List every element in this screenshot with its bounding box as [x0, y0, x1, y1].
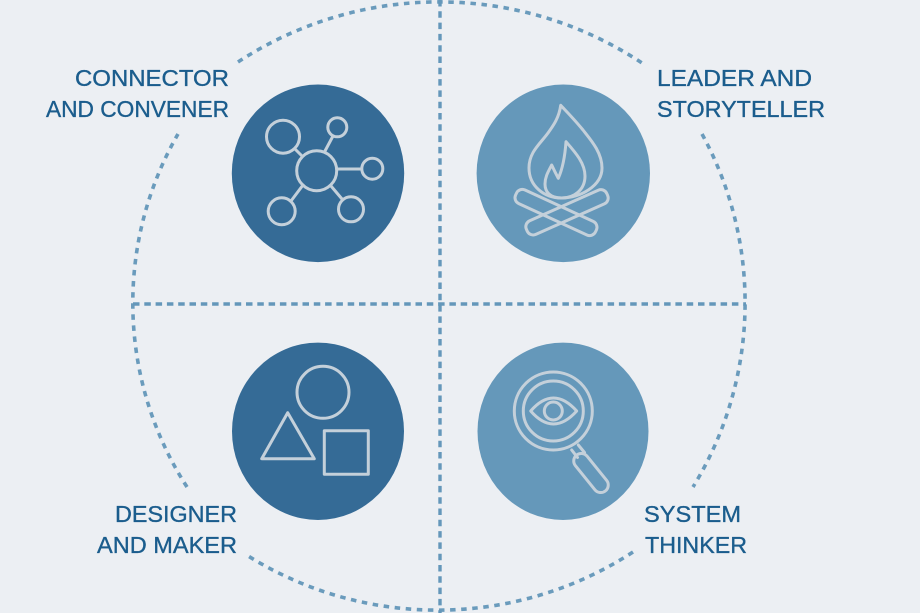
icon: magnifier with eye on light circle: [478, 343, 648, 520]
icon: shapes on dark circle: [232, 343, 404, 520]
label: connector and convener: AND CONVENER: [46, 96, 229, 122]
label: connector and convener: CONNECTOR: [75, 65, 229, 91]
label: designer and maker: [97, 501, 237, 558]
label: leader and storyteller: LEADER AND: [657, 65, 812, 91]
label: leader and storyteller: STORYTELLER: [657, 96, 825, 122]
icon: campfire on light circle: [477, 84, 650, 262]
label: designer and maker: AND MAKER: [97, 532, 237, 558]
label: system thinker: SYSTEM: [644, 501, 741, 527]
icon: network on dark circle: [232, 84, 404, 262]
label: designer and maker: DESIGNER: [115, 501, 237, 527]
label: connector and convener: [46, 65, 229, 122]
label: system thinker: [644, 501, 747, 558]
label: leader and storyteller: [657, 65, 825, 122]
label: system thinker: THINKER: [645, 532, 747, 558]
